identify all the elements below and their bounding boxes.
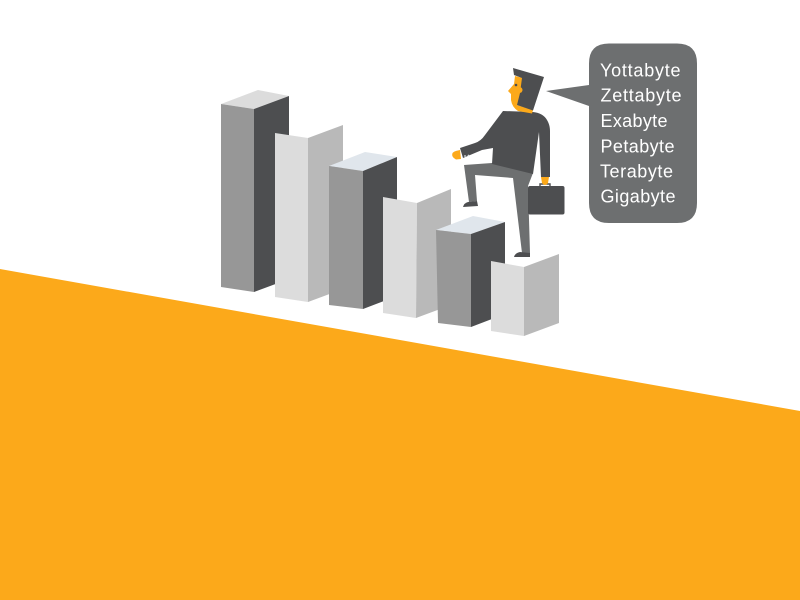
orange slanted background: [0, 269, 800, 600]
torso and arms: [460, 111, 550, 177]
data unit list: Yottabyte: [600, 60, 680, 80]
icon: briefcase: [528, 184, 564, 214]
data unit list: Zettabyte: [600, 86, 682, 106]
rear foot shoe: [514, 252, 530, 257]
data unit list: Petabyte: [600, 136, 674, 156]
data unit list: Terabyte: [600, 162, 673, 182]
data unit list: [600, 60, 682, 206]
bar 5: [436, 216, 505, 327]
eye: [515, 84, 517, 86]
bar 6: [491, 254, 559, 336]
shirt cuff buttons: [464, 155, 469, 157]
bar 3: [329, 152, 397, 309]
face and neck: [508, 76, 533, 114]
hair and head: [513, 68, 544, 110]
rear leg and raised thigh: [464, 163, 533, 253]
raised foot shoe: [463, 201, 478, 207]
bar chart steps: [221, 90, 559, 336]
data unit list: Exabyte: [600, 111, 668, 131]
bar 1: [221, 90, 289, 292]
speech bubble: [546, 44, 697, 223]
bar 2: [275, 125, 343, 302]
bubble shape: [546, 44, 697, 223]
icon: hand: [452, 150, 461, 160]
ear: [516, 87, 522, 93]
businessman climbing the bars: [452, 68, 564, 257]
bar 4: [383, 189, 451, 318]
data unit list: Gigabyte: [600, 186, 676, 206]
hand holding briefcase: [541, 177, 549, 185]
